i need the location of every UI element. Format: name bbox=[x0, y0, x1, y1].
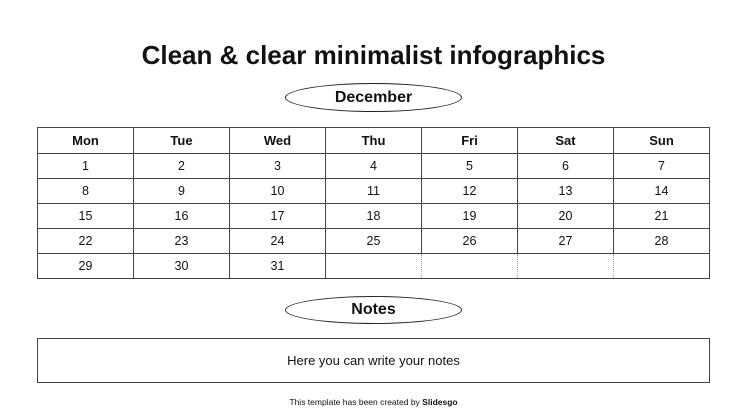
calendar table: 20 bbox=[559, 209, 572, 223]
calendar table: Mon bbox=[72, 133, 99, 148]
calendar table: 4 bbox=[370, 159, 377, 173]
calendar table: 28 bbox=[655, 234, 668, 248]
calendar table: 19 bbox=[463, 209, 476, 223]
calendar table: 8 bbox=[82, 184, 89, 198]
calendar table bbox=[37, 127, 710, 279]
calendar table: Tue bbox=[170, 133, 193, 148]
calendar table: 2 bbox=[178, 159, 185, 173]
calendar table: 22 bbox=[79, 234, 92, 248]
month label: December bbox=[335, 89, 412, 106]
calendar table: Sat bbox=[555, 133, 576, 148]
calendar table: 12 bbox=[463, 184, 476, 198]
calendar table: 30 bbox=[175, 259, 188, 273]
calendar table: 18 bbox=[367, 209, 380, 223]
calendar table: 3 bbox=[274, 159, 281, 173]
calendar table: 23 bbox=[175, 234, 188, 248]
calendar table: 14 bbox=[655, 184, 668, 198]
calendar table: 7 bbox=[658, 159, 665, 173]
notes label: Notes bbox=[351, 301, 396, 318]
calendar table: Thu bbox=[362, 133, 385, 148]
calendar table: 15 bbox=[79, 209, 92, 223]
calendar table: 5 bbox=[466, 159, 473, 173]
notes box: Here you can write your notes bbox=[287, 353, 460, 368]
calendar table: 17 bbox=[271, 209, 284, 223]
calendar table: 26 bbox=[463, 234, 476, 248]
calendar table: 21 bbox=[655, 209, 668, 223]
calendar table: 24 bbox=[271, 234, 284, 248]
calendar table: 1 bbox=[82, 159, 89, 173]
calendar table: Wed bbox=[264, 133, 291, 148]
calendar table: 10 bbox=[271, 184, 284, 198]
calendar table: 13 bbox=[559, 184, 572, 198]
title: Clean & clear minimalist infographics bbox=[142, 40, 605, 70]
notes box bbox=[37, 338, 710, 383]
calendar table: 11 bbox=[367, 184, 380, 198]
month label bbox=[285, 83, 462, 112]
calendar table: 25 bbox=[367, 234, 380, 248]
calendar table: 16 bbox=[175, 209, 188, 223]
calendar table: 31 bbox=[271, 259, 284, 273]
calendar table: 27 bbox=[559, 234, 572, 248]
notes label bbox=[285, 296, 462, 324]
calendar table: Sun bbox=[649, 133, 674, 148]
footer: This template has been created by Slidesgo bbox=[289, 397, 458, 407]
calendar table: 6 bbox=[562, 159, 569, 173]
calendar table: 29 bbox=[79, 259, 92, 273]
calendar table: Fri bbox=[461, 133, 478, 148]
calendar table: 9 bbox=[178, 184, 185, 198]
